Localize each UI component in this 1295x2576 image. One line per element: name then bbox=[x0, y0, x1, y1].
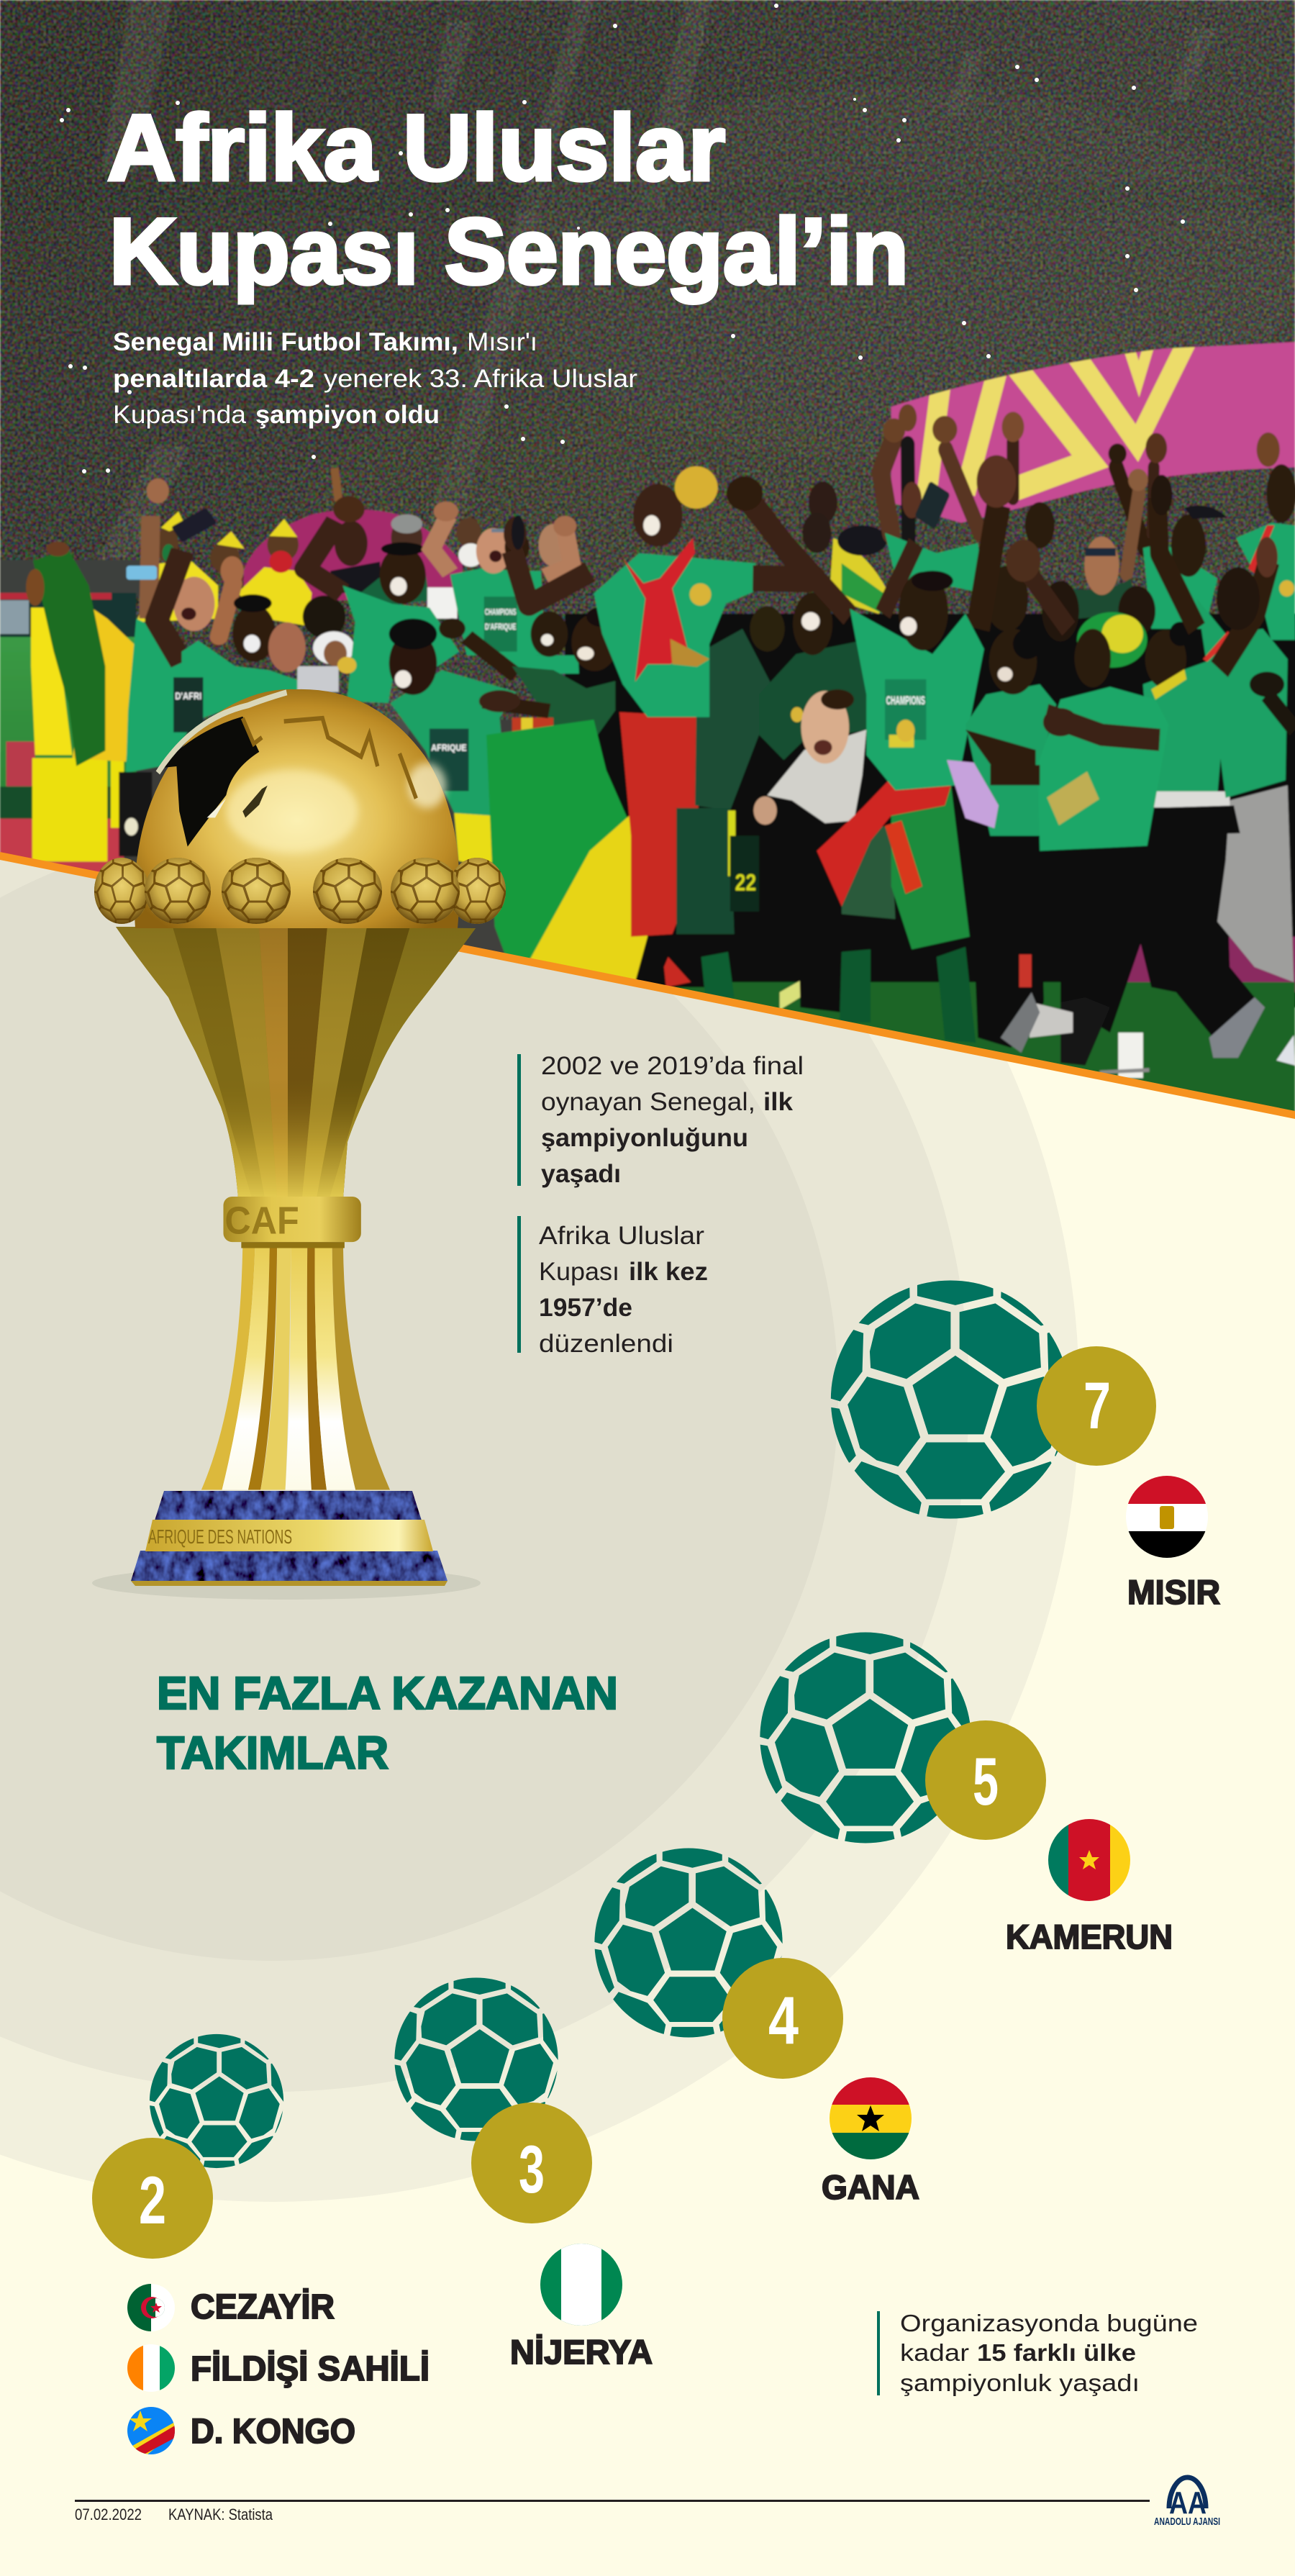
photo: Senegal team celebrating in the stadium: CHAMPIONS bbox=[886, 694, 925, 707]
trophy shadow bbox=[92, 1566, 481, 1600]
footer: date and source bbox=[75, 2500, 1150, 2523]
team: Nijerya 3 titles bbox=[386, 1973, 653, 2371]
footer: date and source: KAYNAK: Statista bbox=[168, 2505, 273, 2523]
flag: DR Congo bbox=[127, 2407, 175, 2454]
flag: Cameroon bbox=[1048, 1819, 1130, 1901]
intro paragraph: penaltılarda 4-2 bbox=[113, 365, 314, 393]
icon: football 3 bbox=[386, 1973, 573, 2146]
players: left group bbox=[0, 468, 619, 899]
label: Nijerya: NİJERYA bbox=[510, 2333, 653, 2371]
players: central cluster and flag: 22 bbox=[735, 870, 756, 896]
intro paragraph: şampiyon oldu bbox=[255, 401, 440, 429]
team: Cezayir, Fildişi Sahili, D. Kongo 2 titles bbox=[92, 2031, 430, 2454]
icon: football 7 bbox=[819, 1274, 1092, 1525]
trophy bowl bbox=[108, 925, 482, 1205]
trophy bbox=[91, 689, 511, 1600]
team: Kamerun 5 titles bbox=[749, 1626, 1173, 1956]
flag: Egypt bbox=[1126, 1476, 1208, 1559]
badge 5: 5 bbox=[973, 1743, 999, 1819]
badge 2: 2 bbox=[139, 2162, 166, 2238]
badge 5 bbox=[925, 1720, 1046, 1840]
badge 4 bbox=[722, 1958, 843, 2079]
callout: first title: oynayan Senegal, bbox=[541, 1088, 755, 1116]
heading: most winning teams: EN FAZLA KAZANAN bbox=[157, 1667, 618, 1719]
callout: first title: şampiyonluğunu bbox=[541, 1124, 748, 1152]
flag: Nigeria bbox=[540, 2244, 623, 2326]
callout: first tournament 1957: ilk kez bbox=[629, 1258, 708, 1286]
trophy lapis base bbox=[131, 1491, 447, 1586]
callout: 15 different countries: şampiyonluk yaşadı bbox=[900, 2369, 1140, 2396]
flag: Algeria bbox=[127, 2284, 175, 2331]
icon: football 4 bbox=[585, 1843, 800, 2043]
title: Afrika Uluslar bbox=[107, 95, 725, 200]
callout: 15 different countries: 15 farklı ülke bbox=[977, 2339, 1136, 2366]
intro paragraph: Kupası'nda bbox=[113, 401, 247, 429]
callout: first tournament 1957 bbox=[517, 1216, 708, 1358]
confetti dots bbox=[60, 4, 1185, 473]
players: left group: D'AFRI bbox=[175, 691, 201, 702]
heading: most winning teams: TAKIMLAR bbox=[157, 1727, 388, 1779]
trophy ring with CAF bbox=[223, 1197, 361, 1243]
players: left group: AFRIQUE bbox=[431, 742, 467, 753]
label: Gana: GANA bbox=[822, 2168, 919, 2206]
players: central cluster and flag bbox=[486, 592, 871, 1010]
badge 4: 4 bbox=[768, 1982, 799, 2058]
callout: 15 different countries bbox=[877, 2310, 1198, 2396]
callout: first tournament 1957: düzenlendi bbox=[539, 1330, 673, 1358]
title: Kupası Senegal’in bbox=[109, 199, 909, 304]
callout: first title: 2002 ve 2019’da final bbox=[541, 1052, 804, 1080]
players: back row bbox=[565, 404, 1295, 1123]
badge 2 bbox=[92, 2138, 213, 2259]
flag: Ivory Coast bbox=[127, 2344, 175, 2392]
logo: Anadolu Ajansı: ANADOLU AJANSI bbox=[1154, 2516, 1220, 2528]
intro paragraph bbox=[113, 328, 637, 429]
trophy stem flutes bbox=[201, 1197, 390, 1490]
label: Kamerun: KAMERUN bbox=[1006, 1918, 1173, 1956]
label: D. Kongo: D. KONGO bbox=[191, 2413, 355, 2451]
intro paragraph: Mısır'ı bbox=[467, 328, 537, 356]
badge 3: 3 bbox=[519, 2131, 545, 2207]
banner: pink CAN banner bbox=[891, 339, 1295, 523]
diagonal orange band bbox=[0, 852, 1295, 1119]
flag: Ghana bbox=[830, 2077, 912, 2160]
players: left group: D'AFRIQUE bbox=[485, 622, 517, 632]
title bbox=[107, 95, 909, 304]
intro paragraph: yenerek 33. Afrika Uluslar bbox=[324, 365, 637, 393]
heading: most winning teams bbox=[157, 1667, 618, 1779]
callout: first title: yaşadı bbox=[541, 1160, 621, 1188]
photo: Senegal team celebrating in the stadium bbox=[0, 0, 1295, 1123]
logo: Anadolu Ajansı: AA bbox=[1169, 2485, 1207, 2521]
callout: first title bbox=[517, 1052, 804, 1188]
badge 3 bbox=[471, 2103, 592, 2223]
label: Fildişi Sahili: FİLDİŞİ SAHİLİ bbox=[191, 2350, 430, 2388]
team: Mısır 7 titles bbox=[819, 1274, 1220, 1611]
label: Mısır: MISIR bbox=[1127, 1573, 1220, 1611]
icon: football 2 bbox=[142, 2031, 296, 2172]
trophy small gold balls bbox=[91, 856, 511, 926]
label: Cezayir: CEZAYİR bbox=[191, 2288, 335, 2326]
callout: first title: ilk bbox=[763, 1088, 794, 1116]
team: Gana 4 titles bbox=[585, 1843, 919, 2206]
callout: 15 different countries: Organizasyonda bugüne bbox=[900, 2310, 1198, 2336]
badge 7 bbox=[1037, 1346, 1156, 1466]
callout: 15 different countries: kadar bbox=[900, 2339, 969, 2366]
trophy globe bbox=[135, 689, 460, 928]
callout: first tournament 1957: 1957’de bbox=[539, 1294, 632, 1322]
logo: Anadolu Ajansı bbox=[1154, 2477, 1220, 2528]
icon: football 5 bbox=[749, 1626, 991, 1849]
players: left group: CHAMPIONS bbox=[485, 607, 517, 617]
badge 7: 7 bbox=[1083, 1369, 1111, 1443]
callout: first tournament 1957: Afrika Uluslar bbox=[539, 1222, 704, 1250]
intro paragraph: Senegal Milli Futbol Takımı, bbox=[113, 328, 458, 356]
concentric background circles bbox=[0, 587, 1079, 2202]
footer: date and source: 07.02.2022 bbox=[75, 2505, 142, 2523]
trophy lapis base: AFRIQUE DES NATIONS bbox=[148, 1525, 292, 1548]
callout: first tournament 1957: Kupası bbox=[539, 1258, 619, 1286]
trophy ring with CAF: CAF bbox=[224, 1200, 299, 1243]
